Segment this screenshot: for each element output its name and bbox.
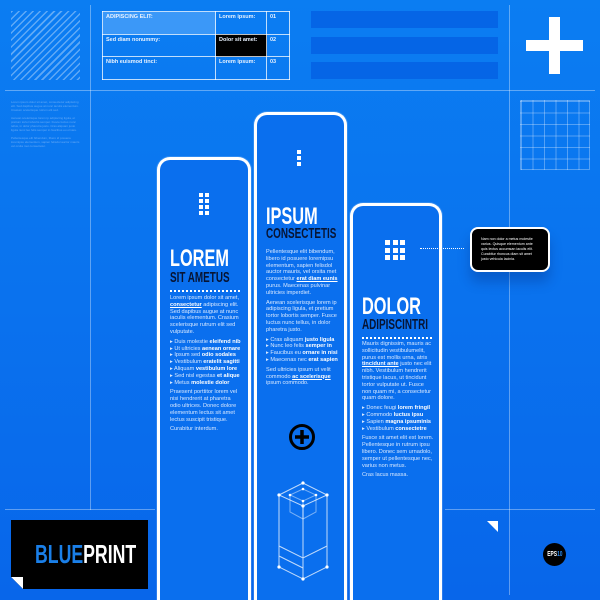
text block: tristique lacus, ut tincidunt [362, 375, 426, 381]
text block: ▸ Maecenas nec erat sapien [266, 357, 338, 363]
text block: ▸ Cras aliquam justo ligula [266, 337, 334, 343]
table: ADIPISCING ELIT: [106, 14, 153, 20]
heading: ipsum: IPSUM [266, 203, 318, 230]
text block: ▸ Ut ultricies aenean ornare [170, 346, 240, 352]
text block: consectetur erat diam eunis [266, 276, 338, 282]
text block: Pellentesque in rutrum ipsu [362, 442, 430, 448]
panel: lorem [157, 157, 251, 600]
text block: ▸ Duis molestie eleifend nib [170, 339, 241, 345]
small text block: Aenean scelerisque lorem ip adipiscing ligula, et pretium tortor lobortis semper. Fusce luctus nunc tellus, in dolor pharetra justo. Cras aliquam justo ligula nunc leo felis semper in faucibus eu ornare. [11, 116, 77, 132]
text block: luctus nunc tellus, in dolor [266, 320, 330, 326]
logo: blueprint card [11, 520, 148, 589]
icon: dots 1x3 [297, 150, 301, 166]
icon: dots 3x3 [385, 240, 405, 260]
text block: Fusce sit amet elit est lorem. [362, 435, 433, 441]
table: Lorem ipsum: [219, 59, 255, 65]
table: Sed diam nonummy: [106, 37, 160, 43]
text block: vulputate. [170, 329, 194, 335]
text block: ipsum commodo. [266, 380, 309, 386]
heading: lorem: LOREM [170, 245, 229, 272]
text block: ▸ Sed nisl egestas et alique [170, 373, 240, 379]
table: Dolor sit amet: [219, 37, 258, 43]
text block: Pellentesque elit bibendum, [266, 249, 335, 255]
text block: quam dolore. [362, 395, 395, 401]
icon: plus [526, 17, 583, 74]
text block: ▸ Aliquam vestibulum lore [170, 366, 237, 372]
text block: libero. Donec sem urnadolo, [362, 449, 432, 455]
heading: dolor: DOLOR [362, 293, 421, 320]
text block: libero id posuere loremipsu [266, 256, 333, 262]
text block: pharetra justo. [266, 327, 302, 333]
text block: Lorem ipsum dolor sit amet, [170, 295, 239, 301]
panel: ipsum: CONSECTETIS [266, 225, 336, 242]
text block: elementum, sapien felisdol [266, 263, 332, 269]
text block: ▸ Nunc leo felis semper in [266, 343, 332, 349]
text block: semper ut pellentesque nec, [362, 456, 432, 462]
text block: odio ultrices. Donec dolore [170, 403, 236, 409]
text block: Sed ultricies ipsum ut velit [266, 367, 331, 373]
bars [311, 11, 498, 79]
text block: Sed dapibus augue at nunc [170, 309, 238, 315]
text block: tortor vulputate ut. Fusce [362, 382, 424, 388]
text block: ▸ Vestibulum consectetre [362, 426, 427, 432]
text block [266, 249, 338, 386]
text block: Mauris dignissim, mauris ac [362, 341, 431, 347]
small text block [11, 100, 80, 148]
icon: wireframe box [277, 481, 329, 581]
badge: EPS10: EPS10 [547, 551, 562, 558]
callout: Nam non dolor a metus molestie varius. Quisque elementum ante quis lectus accumsan iaculis elit. Curabitur rhoncus diam sit amet justo vehicula lacinia. [481, 237, 533, 261]
table: Lorem ipsum: [219, 14, 255, 20]
callout [470, 227, 550, 272]
icon: plus circle [289, 424, 315, 450]
text block: iaculis elementum. Crasium [170, 315, 239, 321]
small text block: Pellentesque elit bibendum, libero id posuere loremipsu elementum, sapien felisdol auctor mauris vel orsita met consectetur. [11, 136, 79, 148]
text block: elementum lectus sit amet [170, 410, 235, 416]
icon: triangle [487, 521, 498, 532]
table: Nibh euismod tinci: [106, 59, 157, 65]
text block [362, 341, 433, 478]
text block: Aenean scelerisque lorem ip [266, 300, 337, 306]
text block: ▸ Commodo luctus ipsu [362, 412, 423, 418]
text block: ▸ Faucibus eu ornare in nisi [266, 350, 338, 356]
arrow: dotted connector [420, 248, 464, 249]
text block: nibh. Vestibulum hendrerit [362, 368, 427, 374]
panel: lorem: SIT AMETUS [170, 269, 230, 286]
text block: tortor lobortis semper. Fusce [266, 313, 337, 319]
panel: dolor: ADIPISCINTRI [362, 316, 428, 333]
text block: Praesent porttitor lorem vel [170, 389, 237, 395]
text block: nisi hendrerit at pharetra [170, 396, 231, 402]
text block: ultricies imperdiet. [266, 290, 311, 296]
table: 02 [270, 37, 276, 43]
text block: Cras lacus massa. [362, 472, 408, 478]
table [102, 11, 290, 80]
panel: ipsum [254, 112, 347, 600]
icon: dots 2x4 [199, 193, 209, 215]
table: 03 [270, 59, 276, 65]
text block: Curabitur interdum. [170, 426, 218, 432]
badge: EPS10 [543, 543, 566, 566]
text block: purus. Maecenas pulvinar [266, 283, 330, 289]
table: 01 [270, 14, 276, 20]
text block: scelerisque rutrum elit sed [170, 322, 235, 328]
text block: adipiscing ligula, et pretium [266, 306, 333, 312]
icon: hatched square [11, 11, 80, 80]
logo: blueprint card: BLUEPRINT [35, 539, 136, 569]
text block: purus est mollis urna, atris [362, 355, 427, 361]
text block: ▸ Metus molestie dolor [170, 380, 229, 386]
text block: ▸ Vestibulum eratelit sagitti [170, 359, 240, 365]
text block: sollicitudin vestibulumelit, [362, 348, 425, 354]
text block: ▸ Sapien magna ipsuminis [362, 419, 431, 425]
text block [170, 295, 241, 432]
text block: consectetur adipiscing elit. [170, 302, 238, 308]
text block: tincidunt ante justo nec elit [362, 361, 431, 367]
icon: grid [520, 100, 590, 170]
text block: ▸ Donec feugi lorem fringil [362, 405, 430, 411]
text block: varius non metus. [362, 463, 406, 469]
text block: auctor mauris, vel orsita met [266, 269, 336, 275]
text block: non quam mi, a consectetur [362, 389, 431, 395]
panel: dolor [350, 203, 442, 600]
small text block: Lorem ipsum dolor sit amet, consectetur adipiscing elit. Sed dapibus augue at nunc iaculis elementum. Crasium scelerisque rutrum elit sed. [11, 100, 79, 112]
text block: commodo ac scelerisque [266, 374, 331, 380]
text block: lectus suscipit tristique. [170, 417, 228, 423]
text block: ▸ Ipsum sed odio sodales [170, 352, 236, 358]
